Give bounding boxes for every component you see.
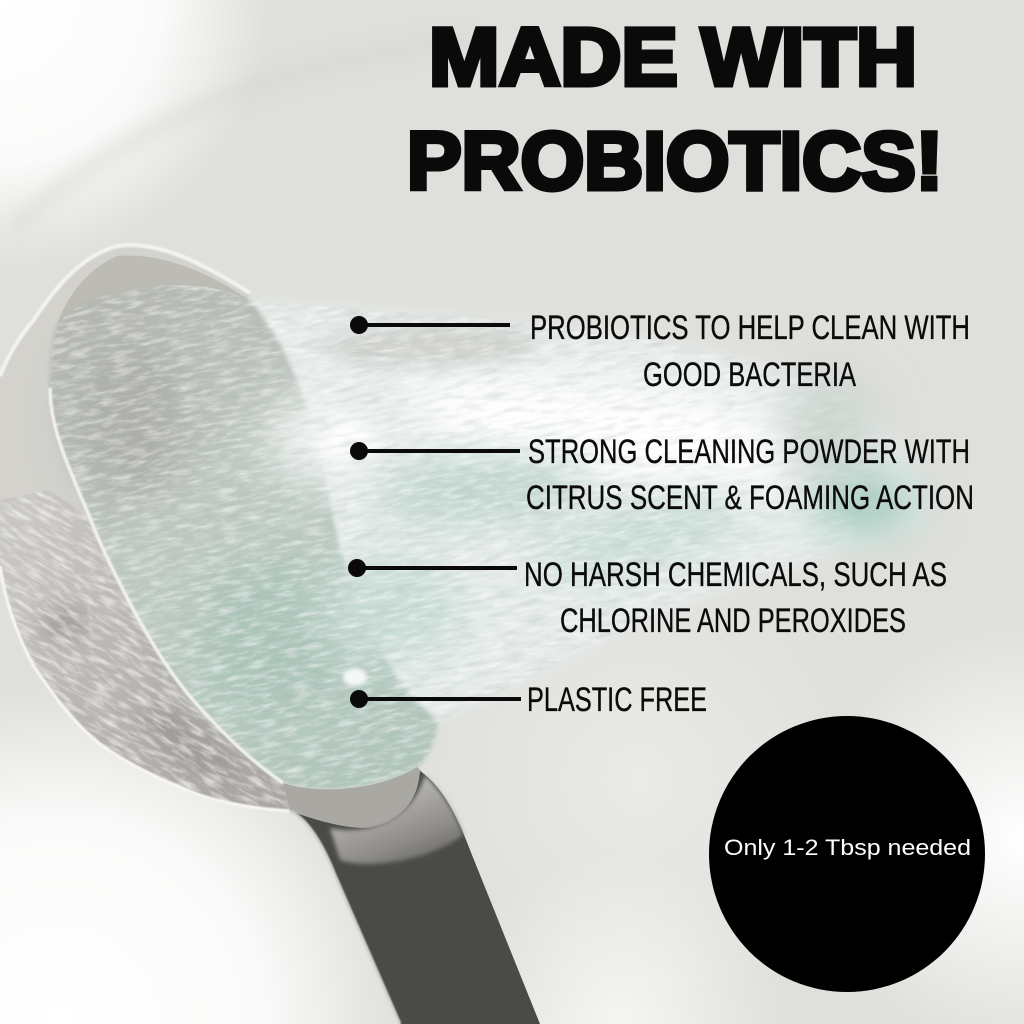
badge: dosage circle: Only 1-2 Tbsp needed [724,835,971,860]
badge: dosage circle [709,716,985,992]
scoop: handle [290,771,540,1024]
callout 4: plastic free: PLASTIC FREE [527,681,707,719]
callout 2: cleaning powder [350,433,974,517]
stream: soft body [250,300,926,760]
scoop: neck [283,767,470,860]
title: PROBIOTICS! [407,116,943,207]
scoop: lower outer wall [0,490,290,811]
scoop: rim and inside wall [0,245,250,620]
title [407,12,943,207]
callout 3: no harsh chemicals [348,556,947,640]
powder texture [50,285,860,789]
callout 4: plastic free [350,681,707,719]
callout 1: probiotics [350,309,970,394]
callout 1: probiotics: GOOD BACTERIA [643,356,856,394]
scoop: powder fill [50,285,438,789]
title: MADE WITH [429,12,917,103]
scoop [0,243,860,1024]
powder stream and powder in the scoop [250,300,926,760]
callout 3: no harsh chemicals: CHLORINE AND PEROXIDES [560,602,906,640]
